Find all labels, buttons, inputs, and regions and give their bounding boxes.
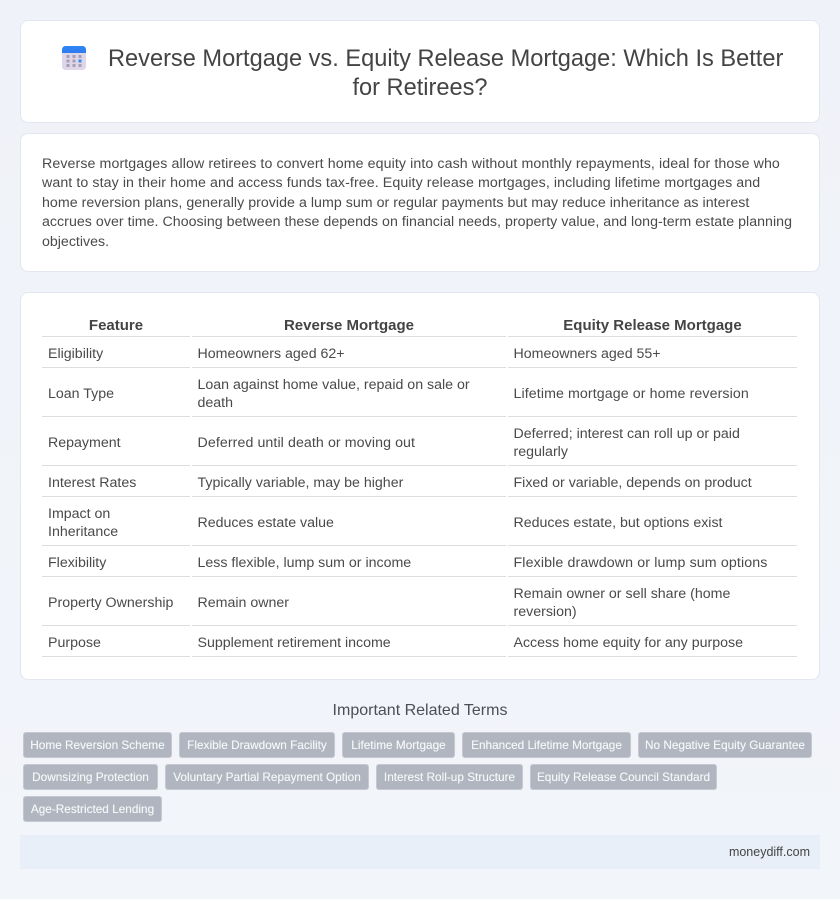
row: repayment: Deferred; interest can roll up or paid — [514, 426, 740, 442]
title: for Retirees? — [352, 75, 488, 101]
panel: introduction — [20, 133, 820, 272]
row: interest rates — [48, 475, 752, 491]
tag: Interest Roll-up Structure — [384, 770, 515, 784]
tag — [23, 796, 162, 822]
tag — [462, 732, 631, 758]
row: property ownership — [48, 586, 730, 620]
tag: Downsizing Protection — [32, 770, 149, 784]
tag — [638, 732, 812, 758]
header row — [89, 317, 742, 334]
tag: Lifetime Mortgage — [351, 738, 446, 752]
text block: introduction — [42, 156, 792, 250]
row: repayment — [48, 426, 740, 460]
text block: introduction: objectives. — [42, 234, 109, 250]
row: loan type: death — [198, 394, 233, 410]
tag: Enhanced Lifetime Mortgage — [471, 738, 622, 752]
row: loan type — [48, 376, 749, 410]
row: repayment: regularly — [514, 444, 568, 460]
footer — [20, 835, 820, 869]
tag — [342, 732, 455, 758]
tag — [23, 764, 158, 790]
text block: introduction: home reversion plans, generally provide a lump sum or regular payments but may reduce inheritance as interest — [42, 195, 749, 211]
tag — [165, 764, 369, 790]
row: eligibility: Homeowners aged 55+ — [514, 346, 661, 362]
table: comparison — [42, 317, 797, 657]
tag — [530, 764, 717, 790]
row: interest rates: Typically variable, may be higher — [198, 475, 403, 491]
source credit: moneydiff.com — [729, 845, 810, 859]
row: loan type: Lifetime mortgage or home reversion — [514, 386, 749, 402]
panel: comparison table — [20, 292, 820, 680]
row: flexibility: Flexibility — [48, 555, 106, 571]
row: impact on inheritance: Inheritance — [48, 524, 118, 540]
header row: Equity Release Mortgage — [563, 317, 742, 334]
row: property ownership: Property Ownership — [48, 595, 173, 611]
row: impact on inheritance: Reduces estate value — [198, 515, 334, 531]
header row: Feature — [89, 317, 143, 334]
row: property ownership: Remain owner or sell share (home — [514, 586, 730, 602]
row: property ownership: reversion) — [514, 604, 577, 620]
tag: Flexible Drawdown Facility — [187, 738, 327, 752]
row: eligibility: Homeowners aged 62+ — [198, 346, 345, 362]
row: purpose — [48, 635, 743, 651]
row: interest rates: Fixed or variable, depends on product — [514, 475, 752, 491]
row: interest rates: Interest Rates — [48, 475, 136, 491]
row: repayment: Repayment — [48, 435, 121, 451]
row: impact on inheritance: Impact on — [48, 506, 110, 522]
row: flexibility: Flexible drawdown or lump sum options — [514, 555, 768, 571]
row: eligibility — [48, 346, 661, 362]
row: loan type: Loan against home value, repaid on sale or — [198, 376, 470, 392]
icon: calendar — [62, 46, 86, 70]
row: property ownership: Remain owner — [198, 595, 289, 611]
tag list: related terms — [23, 732, 812, 822]
tag — [23, 732, 172, 758]
row: impact on inheritance: Reduces estate, but options exist — [514, 515, 722, 531]
row: flexibility — [48, 555, 768, 571]
header row: Reverse Mortgage — [284, 317, 414, 334]
text block: introduction: accrues over time. Choosing between these depends on financial needs, property value, and long-term estate planning — [42, 214, 792, 230]
title — [108, 46, 783, 101]
tag — [179, 732, 335, 758]
row: impact on inheritance — [48, 506, 722, 540]
tag: Voluntary Partial Repayment Option — [173, 770, 361, 784]
row: purpose: Supplement retirement income — [198, 635, 391, 651]
tag — [376, 764, 523, 790]
panel: title header — [20, 20, 820, 123]
row: purpose: Purpose — [48, 635, 101, 651]
row: eligibility: Eligibility — [48, 346, 103, 362]
row: repayment: Deferred until death or moving out — [198, 435, 415, 451]
tag: Age-Restricted Lending — [31, 802, 154, 816]
row: flexibility: Less flexible, lump sum or income — [198, 555, 411, 571]
tag: Home Reversion Scheme — [30, 738, 165, 752]
text block: introduction: want to stay in their home and access funds tax-free. Equity release mortgages, including lifetime mortgages and — [42, 175, 760, 191]
row: loan type: Loan Type — [48, 386, 114, 402]
row: purpose: Access home equity for any purpose — [514, 635, 743, 651]
heading: important related terms: Important Related Terms — [333, 702, 507, 719]
tag: No Negative Equity Guarantee — [645, 738, 805, 752]
title: Reverse Mortgage vs. Equity Release Mortgage: Which Is Better — [108, 46, 783, 72]
text block: introduction: Reverse mortgages allow retirees to convert home equity into cash without monthly repayments, ideal for those who — [42, 156, 780, 172]
tag: Equity Release Council Standard — [537, 770, 710, 784]
